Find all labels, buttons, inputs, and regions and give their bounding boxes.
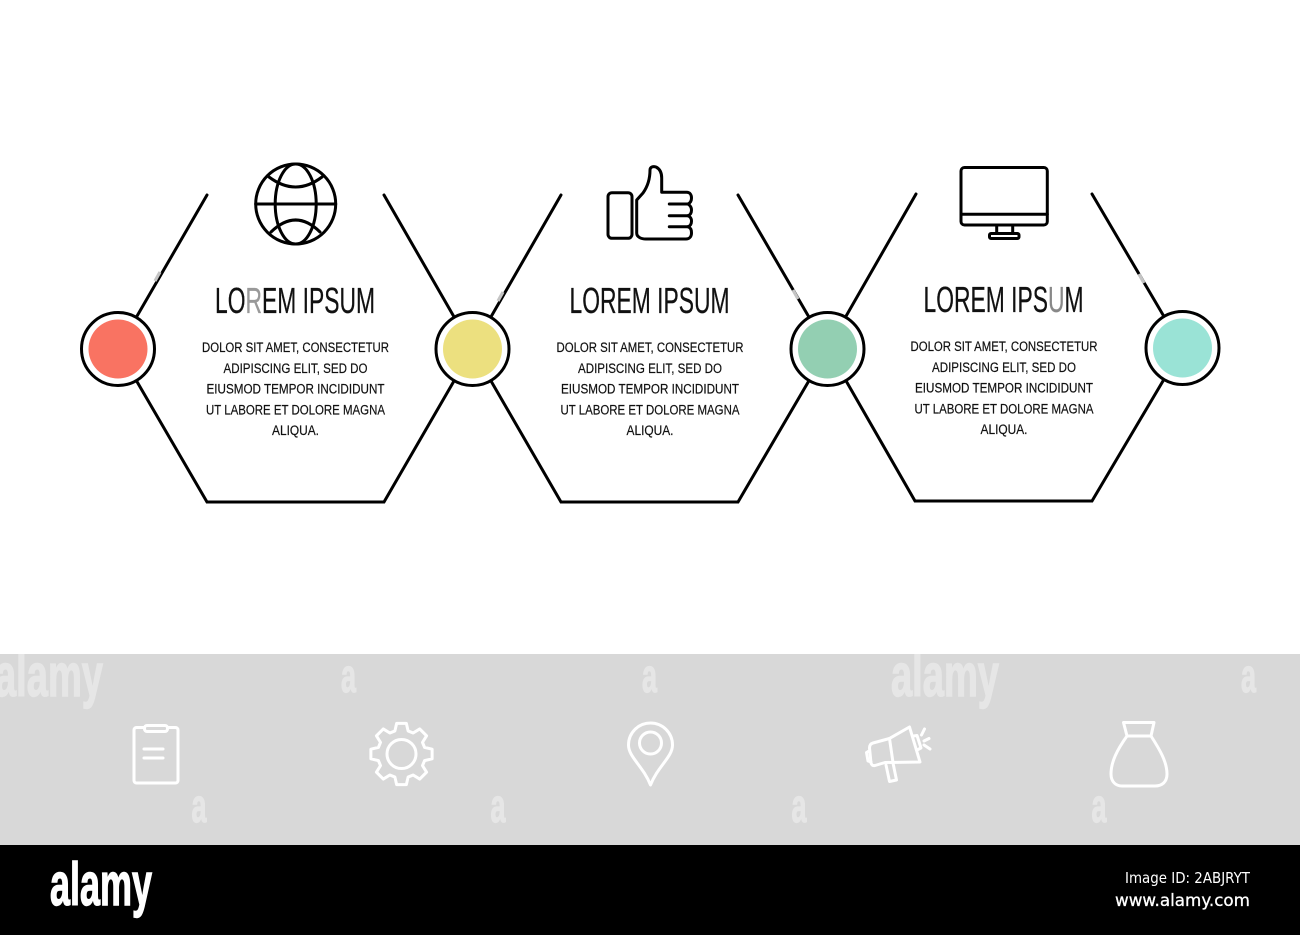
watermarks: a: [192, 779, 207, 832]
text block 1: ALIQUA.: [272, 423, 319, 438]
heading 1: LOREM IPSUM: [215, 280, 375, 321]
heading 3: LOREM IPSUM: [924, 279, 1083, 320]
icon: gear: [371, 723, 432, 785]
watermarks: [0, 654, 1256, 823]
hexagon 3 outline: [828, 194, 1182, 501]
watermarks: a: [490, 779, 506, 832]
hexagon 1 outline: [118, 195, 472, 502]
text block 2: DOLOR SIT AMET, CONSECTETUR: [556, 340, 744, 355]
panel: hexagon 1: [118, 164, 472, 502]
text block 3: UT LABORE ET DOLORE MAGNA: [914, 401, 1094, 416]
text block 2: [556, 340, 744, 438]
text block 1: ADIPISCING ELIT, SED DO: [224, 361, 368, 376]
watermarks: alamy: [891, 642, 999, 709]
footer logo: alamy: [50, 851, 152, 918]
text block 1: DOLOR SIT AMET, CONSECTETUR: [202, 340, 389, 355]
text block 1: [202, 340, 389, 438]
text block 3: DOLOR SIT AMET, CONSECTETUR: [910, 339, 1098, 354]
panel: hexagon 3: [828, 168, 1182, 501]
node: red circle: [82, 312, 154, 386]
watermarks: a: [341, 649, 356, 702]
node: yellow circle: [436, 312, 509, 386]
text block 3: EIUSMOD TEMPOR INCIDIDUNT: [915, 381, 1093, 396]
heading 2: LOREM IPSUM: [570, 280, 730, 321]
grey icon band: [0, 654, 1300, 845]
text block 3: ADIPISCING ELIT, SED DO: [932, 360, 1076, 375]
watermarks: a: [642, 649, 657, 702]
icon: globe: [256, 164, 336, 244]
hexagon 2 outline: [472, 195, 828, 502]
icon: monitor: [961, 168, 1047, 238]
text block 3: [910, 339, 1098, 437]
text block 2: EIUSMOD TEMPOR INCIDIDUNT: [561, 382, 739, 397]
icon: megaphone: [866, 727, 930, 782]
node: green circle: [791, 312, 864, 386]
text block 2: UT LABORE ET DOLORE MAGNA: [560, 402, 740, 417]
watermarks: a: [1092, 779, 1107, 832]
watermarks: a: [1241, 649, 1256, 702]
icon: sack: [1111, 722, 1167, 786]
text block 2: ALIQUA.: [626, 423, 674, 438]
watermarks: alamy: [0, 642, 103, 709]
node: teal circle: [1146, 312, 1219, 384]
icon: map pin: [628, 723, 672, 785]
image id: Image ID: 2ABJRYT: [1125, 869, 1251, 887]
website: www.alamy.com: [1115, 891, 1250, 911]
text block 2: ADIPISCING ELIT, SED DO: [578, 361, 722, 376]
panel: hexagon 2: [472, 167, 828, 502]
text block 1: UT LABORE ET DOLORE MAGNA: [206, 402, 385, 417]
text block 1: EIUSMOD TEMPOR INCIDIDUNT: [206, 382, 384, 397]
icon: clipboard: [134, 726, 178, 783]
icon: thumbs up: [608, 167, 692, 239]
watermarks: a: [792, 779, 807, 832]
footer bar: [0, 845, 1300, 935]
text block 3: ALIQUA.: [980, 422, 1028, 437]
